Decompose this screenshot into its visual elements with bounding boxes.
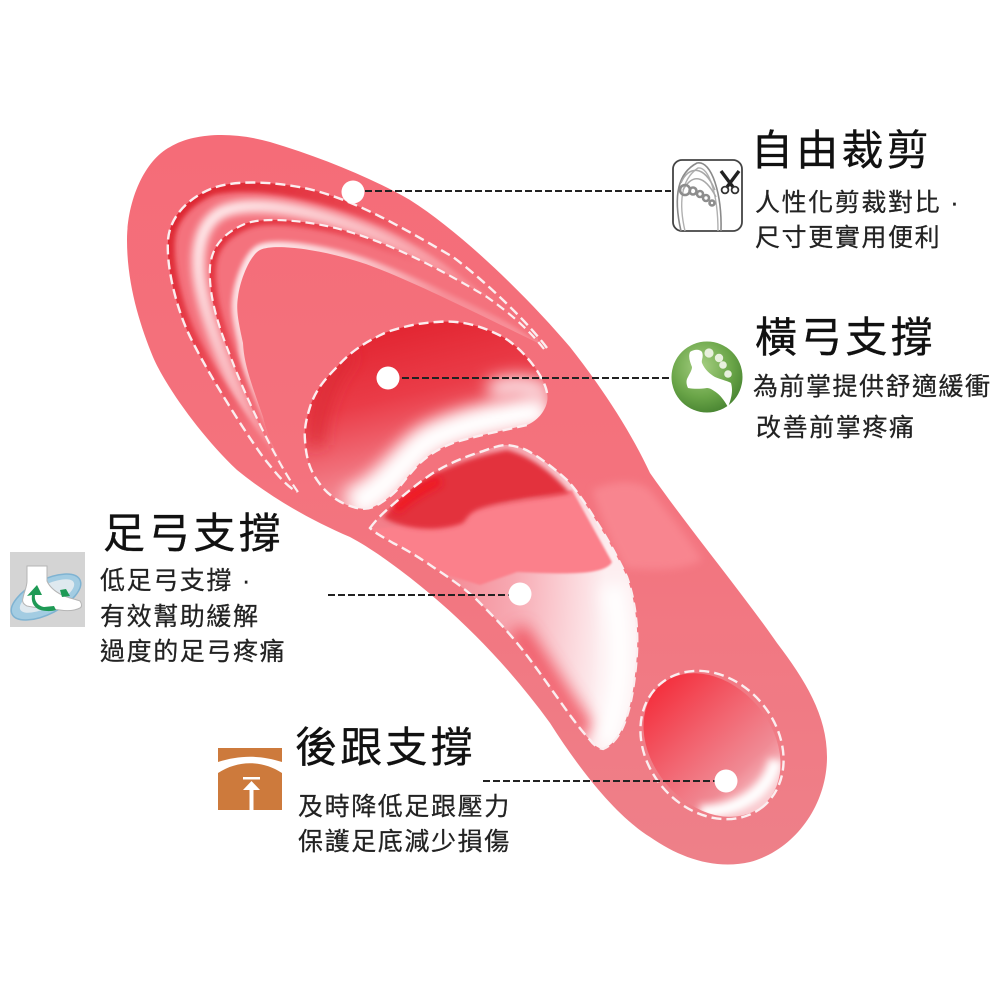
inner toe ridge [210, 220, 538, 448]
forefoot pad [304, 320, 548, 510]
icon: green foot [672, 342, 742, 412]
heel pad fill [644, 673, 780, 817]
heading: transverse arch support: 橫弓支撐 [755, 314, 936, 361]
text: heel support description: 保護足底減少損傷 [298, 828, 511, 856]
text: heel support description: 及時降低足跟壓力 [298, 793, 511, 821]
text: transverse arch description [753, 373, 992, 442]
text: free cutting description: 人性化剪裁對比 · [755, 189, 960, 217]
heading: heel support: 後跟支撐 [295, 724, 476, 771]
marker dot: heel [714, 770, 738, 792]
leader line: free cutting [365, 190, 671, 192]
insole [127, 135, 827, 864]
arch pad fill [365, 440, 645, 755]
arch pad [365, 440, 645, 755]
text: heel support description [298, 793, 511, 856]
leader line: foot arch [328, 594, 510, 596]
text: foot arch description: 低足弓支撐 · [100, 567, 252, 595]
icon: foot arch [4, 552, 88, 629]
arch pad stitch [370, 445, 637, 749]
outer toe ridge [168, 182, 496, 458]
text: transverse arch description: 為前掌提供舒適緩衝 [753, 373, 992, 401]
text: foot arch description [100, 567, 286, 666]
text: free cutting description: 尺寸更實用便利 [755, 224, 941, 252]
heel pad stitch [611, 642, 813, 848]
outer toe stitch [168, 182, 547, 492]
marker dot: transverse arch [376, 366, 400, 390]
inner toe stitch [210, 220, 544, 492]
forefoot pad fill [304, 322, 548, 509]
heading: foot arch support: 足弓支撐 [103, 510, 284, 557]
text: foot arch description: 過度的足弓疼痛 [100, 638, 286, 666]
heading: free cutting: 自由裁剪 [751, 127, 932, 174]
icon: heel support [218, 748, 282, 810]
leader line: transverse arch [402, 377, 673, 379]
text: free cutting description [755, 189, 960, 252]
insole body [127, 135, 827, 864]
marker dot: foot arch [508, 582, 532, 606]
text: foot arch description: 有效幫助緩解 [100, 603, 260, 631]
marker dot: free cutting [342, 180, 364, 204]
icon: insole outline and scissors [673, 160, 742, 231]
heel pad [639, 670, 785, 820]
toe ridges [168, 182, 547, 492]
forefoot pad stitch [305, 322, 547, 509]
pale patch beside arch [592, 482, 702, 570]
text: transverse arch description: 改善前掌疼痛 [756, 414, 916, 442]
leader line: heel [483, 780, 716, 782]
